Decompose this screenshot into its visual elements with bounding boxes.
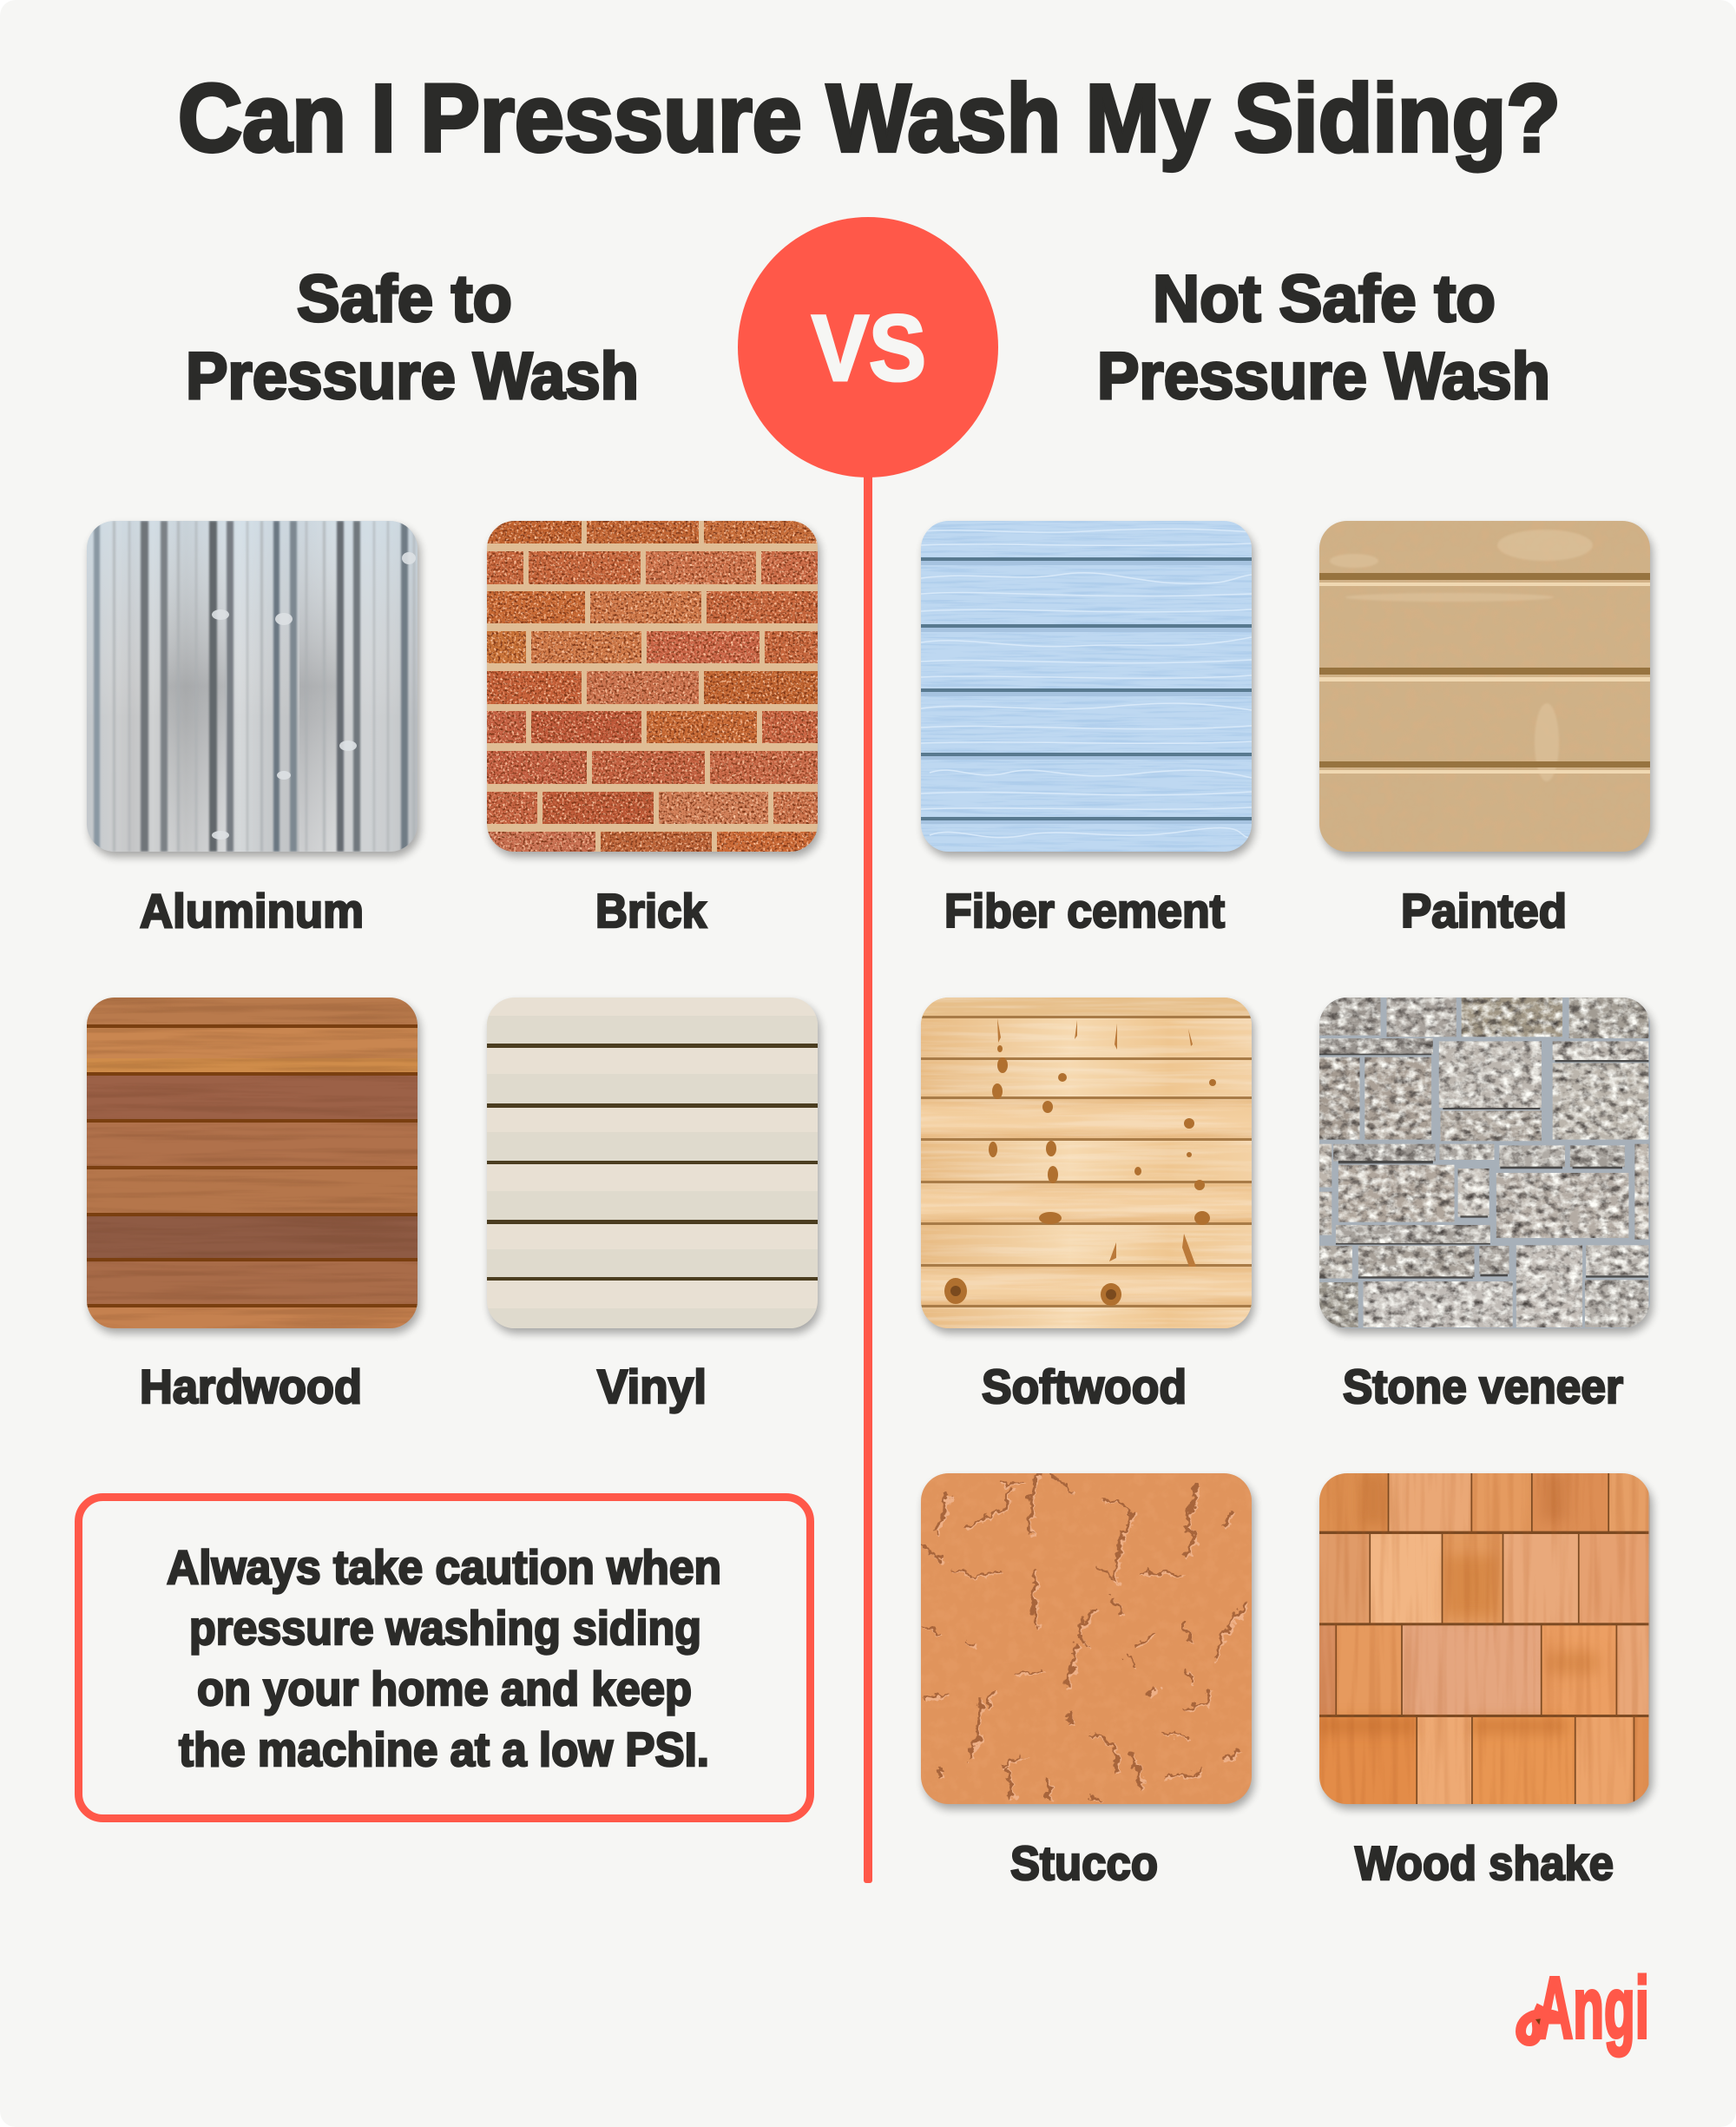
callout text: the machine at a low PSI. — [179, 1722, 709, 1776]
card: softwood — [921, 998, 1254, 1413]
photo: fiber cement — [921, 521, 1254, 857]
card: stucco — [921, 1473, 1254, 1890]
photo: brick — [487, 521, 820, 857]
card: brick — [487, 521, 820, 938]
heading: not safe to pressure wash: Pressure Wash — [1097, 339, 1550, 413]
photo: wood shake — [1319, 1473, 1653, 1809]
card: aluminum — [87, 521, 420, 938]
callout text: pressure washing siding — [189, 1601, 701, 1655]
VS badge: VS — [812, 295, 926, 400]
card: fiber cement — [921, 521, 1254, 938]
photo: aluminum — [87, 521, 420, 857]
label: vinyl: Vinyl — [597, 1360, 707, 1413]
callout text: Always take caution when — [167, 1540, 721, 1594]
callout — [78, 1497, 811, 1818]
title: Can I Pressure Wash My Siding? — [178, 65, 1561, 172]
card: wood shake — [1319, 1473, 1653, 1890]
label: wood shake: Wood shake — [1355, 1836, 1614, 1890]
photo: stucco — [921, 1473, 1254, 1809]
card: stone veneer — [1319, 998, 1653, 1413]
label: stone veneer: Stone veneer — [1343, 1360, 1623, 1413]
label: stucco: Stucco — [1010, 1836, 1158, 1890]
logo: Angi: Angi — [1536, 1959, 1649, 2057]
callout text: on your home and keep — [197, 1662, 692, 1715]
heading: safe to pressure wash: Pressure Wash — [186, 339, 639, 413]
centre divider line — [864, 434, 872, 1883]
heading: safe to pressure wash — [186, 262, 639, 413]
label: painted: Painted — [1401, 884, 1567, 938]
label: aluminum: Aluminum — [140, 884, 364, 938]
label: fiber cement: Fiber cement — [944, 884, 1225, 938]
photo: softwood — [921, 998, 1254, 1333]
VS badge — [738, 217, 998, 477]
callout border — [78, 1497, 811, 1818]
heading: safe to pressure wash: Safe to — [297, 262, 512, 336]
card: hardwood — [87, 998, 420, 1413]
photo: vinyl — [487, 998, 820, 1333]
callout text — [167, 1540, 721, 1776]
heading: not safe to pressure wash: Not Safe to — [1153, 262, 1496, 336]
card: painted — [1319, 521, 1653, 938]
heading: not safe to pressure wash — [1097, 262, 1550, 413]
photo: stone veneer — [1319, 998, 1653, 1333]
label: brick: Brick — [595, 884, 707, 938]
label: hardwood: Hardwood — [140, 1360, 362, 1413]
photo: painted — [1319, 521, 1653, 857]
photo: hardwood — [87, 998, 420, 1333]
card: vinyl — [487, 998, 820, 1413]
logo: Angi — [1521, 1959, 1649, 2057]
label: softwood: Softwood — [982, 1360, 1187, 1413]
